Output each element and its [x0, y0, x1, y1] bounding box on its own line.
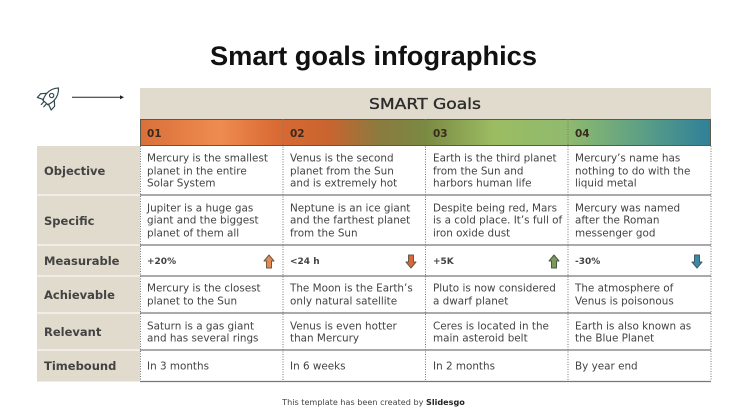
- title: Smart goals infographics: [210, 41, 537, 71]
- panel: table header: SMART Goals: [369, 95, 481, 113]
- row: Objective: [44, 153, 690, 190]
- icon: blue down arrow: [692, 255, 702, 268]
- row: Achievable: The atmosphere of: [574, 283, 674, 295]
- row: Objective: Mercury is the smallest: [147, 153, 268, 165]
- row: Timebound: In 2 months: [433, 361, 495, 373]
- row: Specific: Despite being red, Mars: [433, 203, 557, 215]
- gradient column header row: 03: [433, 128, 448, 140]
- row: Achievable: only natural satellite: [290, 296, 397, 308]
- row: Specific: messenger god: [575, 228, 655, 240]
- row: Specific: Mercury was named: [575, 203, 680, 215]
- row: Measurable: +20%: [147, 257, 176, 267]
- row: Timebound: [44, 359, 638, 373]
- row: Achievable: planet to the Sun: [147, 296, 237, 308]
- row: Objective: Solar System: [147, 178, 216, 190]
- table grid lines: [140, 119, 711, 382]
- row: Objective: from the Sun and: [433, 166, 523, 178]
- row: Relevant: Venus is even hotter: [290, 321, 397, 333]
- row: Relevant: Saturn is a gas giant: [147, 321, 254, 333]
- row: Objective: harbors human life: [433, 178, 532, 190]
- row: Relevant: main asteroid belt: [433, 333, 528, 345]
- row: Achievable: Pluto is now considered: [433, 283, 556, 295]
- row: Specific: iron oxide dust: [433, 228, 510, 240]
- gradient column header row: 02: [290, 128, 305, 140]
- row: Objective: planet from the Sun: [290, 166, 394, 178]
- row: Achievable: Achievable: [44, 288, 115, 302]
- row: Objective: Objective: [44, 164, 106, 178]
- row: Measurable: [44, 254, 702, 268]
- row: Specific: is a cold place. It’s full of: [433, 215, 563, 227]
- gradient column header row: 04: [575, 128, 590, 140]
- row: Objective: nothing to do with the: [575, 166, 690, 178]
- row: Achievable: a dwarf planet: [433, 296, 508, 308]
- row: Relevant: and has several rings: [147, 333, 258, 345]
- gradient column header row: 01: [147, 128, 162, 140]
- panel: table header: [140, 88, 711, 119]
- row: Specific: Neptune is an ice giant: [290, 203, 410, 215]
- row: Measurable: -30%: [575, 257, 600, 267]
- row: Relevant: than Mercury: [290, 333, 359, 345]
- icon: rocket: [36, 82, 65, 112]
- row: Relevant: Relevant: [44, 325, 102, 339]
- row: Achievable: [44, 283, 674, 308]
- row: Objective: Earth is the third planet: [433, 153, 557, 165]
- row: Objective: liquid metal: [575, 178, 637, 190]
- row: Measurable: Measurable: [44, 254, 120, 268]
- icon: orange up arrow: [264, 255, 274, 268]
- row label backgrounds: [37, 146, 140, 382]
- row: Objective: and is extremely hot: [290, 178, 397, 190]
- row: Achievable: Venus is poisonous: [575, 296, 674, 308]
- row: Specific: Specific: [44, 214, 95, 228]
- row: Timebound: In 3 months: [147, 361, 209, 373]
- row: Measurable: +5K: [433, 257, 455, 267]
- row: Specific: [44, 203, 680, 240]
- row: Specific: Jupiter is a huge gas: [146, 203, 253, 215]
- row: Specific: giant and the biggest: [147, 215, 259, 227]
- row: Specific: after the Roman: [575, 215, 659, 227]
- row: Timebound: By year end: [575, 361, 638, 373]
- row: Relevant: Earth is also known as: [575, 321, 691, 333]
- row: Objective: Venus is the second: [290, 153, 394, 165]
- footer credit: This template has been created by Slidesgo: [281, 397, 465, 407]
- icon: orange down arrow: [406, 255, 416, 268]
- gradient column header row: [140, 120, 710, 146]
- icon: green up arrow: [549, 255, 559, 268]
- row: Achievable: Mercury is the closest: [147, 283, 261, 295]
- row: Relevant: the Blue Planet: [575, 333, 654, 345]
- row: Specific: from the Sun: [290, 228, 358, 240]
- row: Timebound: Timebound: [44, 359, 116, 373]
- row: Objective: planet in the entire: [147, 166, 247, 178]
- row: Objective: Mercury’s name has: [575, 153, 680, 165]
- arrow: rocket to table: [72, 95, 124, 99]
- row: Achievable: The Moon is the Earth’s: [289, 283, 413, 295]
- row: Relevant: Ceres is located in the: [433, 321, 549, 333]
- row: Timebound: In 6 weeks: [290, 361, 346, 373]
- row: Specific: planet of them all: [147, 228, 239, 240]
- row: Specific: and the farthest planet: [290, 215, 410, 227]
- row: Relevant: [44, 321, 691, 345]
- row: Measurable: <24 h: [290, 257, 320, 267]
